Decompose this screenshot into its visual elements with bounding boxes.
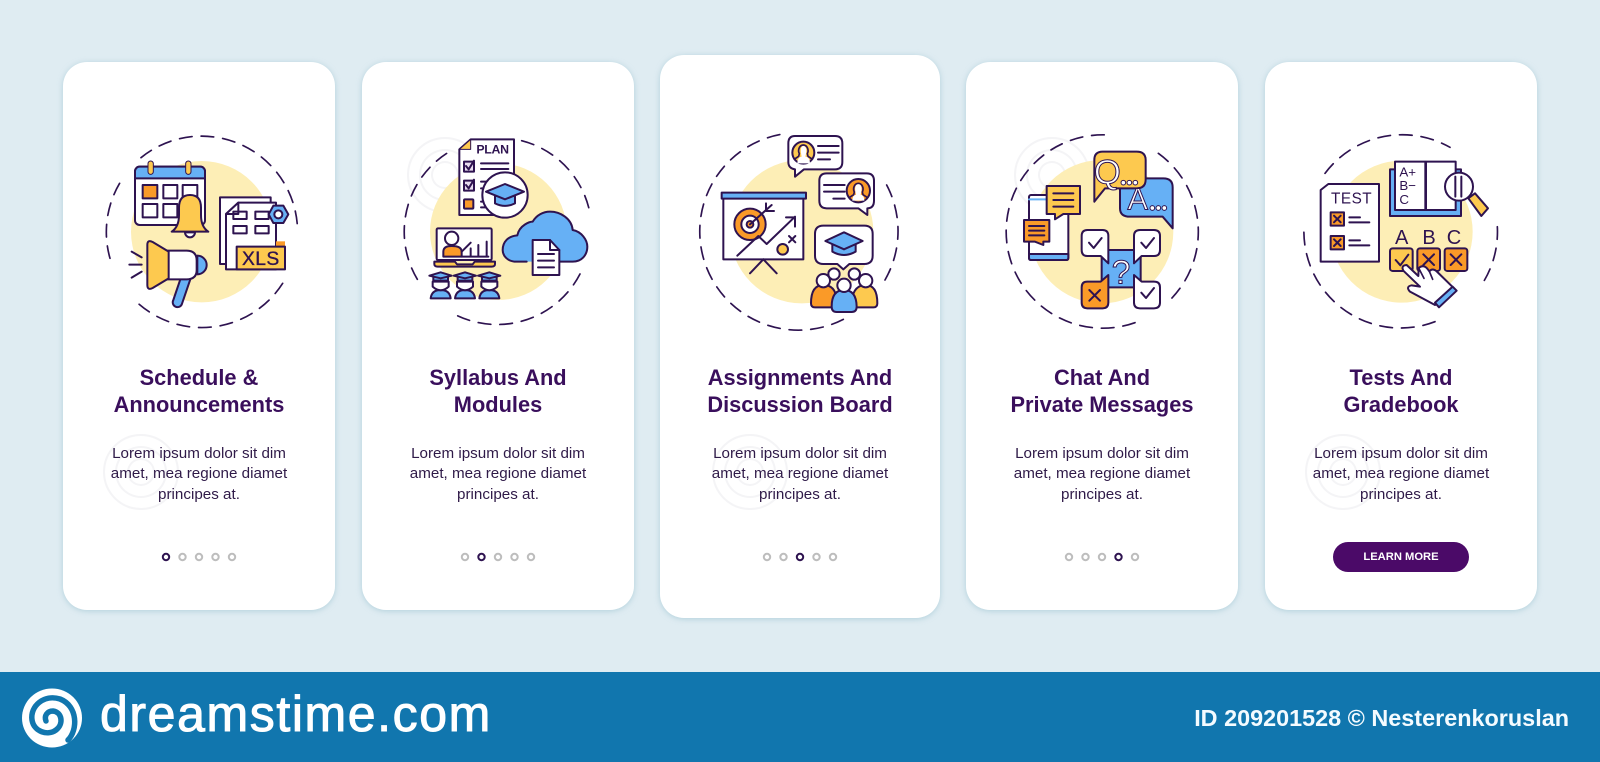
body text: principes at.	[1360, 486, 1442, 503]
body text: amet, mea regione diamet	[111, 465, 287, 482]
icon: presentation board, chat bubbles, group	[698, 134, 899, 331]
pagination dots	[1064, 552, 1140, 562]
body text: principes at.	[158, 486, 240, 503]
wordmark: dreamstime.com	[100, 686, 492, 742]
body text: amet, mea regione diamet	[1014, 465, 1190, 482]
icon: calendar, bell, spreadsheet and megaphone: XLS	[242, 249, 279, 270]
heading: Announcements	[114, 392, 284, 416]
icon: test sheet, grade book, multiple choice: C	[1399, 192, 1409, 207]
icon: test sheet, grade book, multiple choice: A+	[1399, 165, 1416, 180]
heading: Discussion Board	[707, 392, 893, 416]
body text	[712, 445, 888, 503]
icon: test sheet, grade book, multiple choice: C	[1447, 227, 1461, 249]
body text: Lorem ipsum dolor sit dim	[1314, 445, 1488, 462]
heading: Assignments And	[708, 365, 892, 390]
image id and author: ID 209201528 © Nesterenkoruslan	[1194, 705, 1569, 731]
body text: principes at.	[1061, 486, 1143, 503]
footer bar	[0, 672, 1600, 762]
icon: phone messages, Q and A, quiz: Q	[1094, 153, 1121, 191]
pagination dots	[162, 552, 236, 562]
heading: Tests And	[1350, 365, 1452, 390]
logo: spiral	[22, 688, 82, 748]
icon: plan, cloud document, online class: PLAN	[476, 143, 509, 157]
heading	[707, 365, 893, 416]
body text: Lorem ipsum dolor sit dim	[1015, 445, 1189, 462]
body text: amet, mea regione diamet	[1313, 465, 1489, 482]
icon: test sheet, grade book, multiple choice: B	[1422, 227, 1436, 249]
icon: test sheet, grade book, multiple choice: B−	[1399, 178, 1416, 193]
body text: amet, mea regione diamet	[712, 465, 888, 482]
body text	[410, 445, 586, 503]
pagination dots	[460, 552, 536, 562]
icon: phone messages, Q and A, quiz: ?	[1112, 254, 1130, 291]
icon: test sheet, grade book, multiple choice	[1303, 134, 1498, 329]
body text: amet, mea regione diamet	[410, 465, 586, 482]
heading	[1011, 365, 1193, 416]
icon: phone messages, Q and A, quiz	[1005, 134, 1200, 329]
heading	[429, 365, 567, 416]
body text	[1313, 445, 1490, 503]
heading: Private Messages	[1011, 392, 1193, 416]
panel: chat and private messages	[966, 62, 1238, 610]
body text: principes at.	[457, 486, 539, 503]
heading	[114, 365, 284, 416]
button: learn more	[1333, 542, 1469, 572]
icon: test sheet, grade book, multiple choice: A	[1395, 227, 1409, 249]
icon: calendar, bell, spreadsheet and megaphone	[106, 135, 298, 328]
body text	[1014, 445, 1190, 503]
heading: Chat And	[1054, 365, 1150, 390]
body text: Lorem ipsum dolor sit dim	[713, 445, 887, 462]
heading: Syllabus And	[429, 365, 567, 390]
heading: Modules	[454, 392, 542, 416]
panel: syllabus and modules	[362, 62, 634, 610]
panel: schedule and announcements	[63, 62, 335, 610]
body text: Lorem ipsum dolor sit dim	[112, 445, 286, 462]
heading	[1343, 365, 1459, 416]
body text: Lorem ipsum dolor sit dim	[411, 445, 585, 462]
button: learn more: LEARN MORE	[1363, 551, 1439, 563]
panel: assignments and discussion board	[660, 55, 940, 618]
panel: tests and gradebook	[1265, 62, 1537, 610]
heading: Schedule &	[140, 365, 258, 390]
icon: phone messages, Q and A, quiz: A	[1127, 182, 1148, 216]
pagination dots	[762, 552, 838, 562]
icon: test sheet, grade book, multiple choice: TEST	[1331, 190, 1372, 207]
body text	[111, 445, 288, 503]
icon: plan, cloud document, online class	[403, 138, 590, 326]
body text: principes at.	[759, 486, 841, 503]
heading: Gradebook	[1343, 392, 1459, 416]
